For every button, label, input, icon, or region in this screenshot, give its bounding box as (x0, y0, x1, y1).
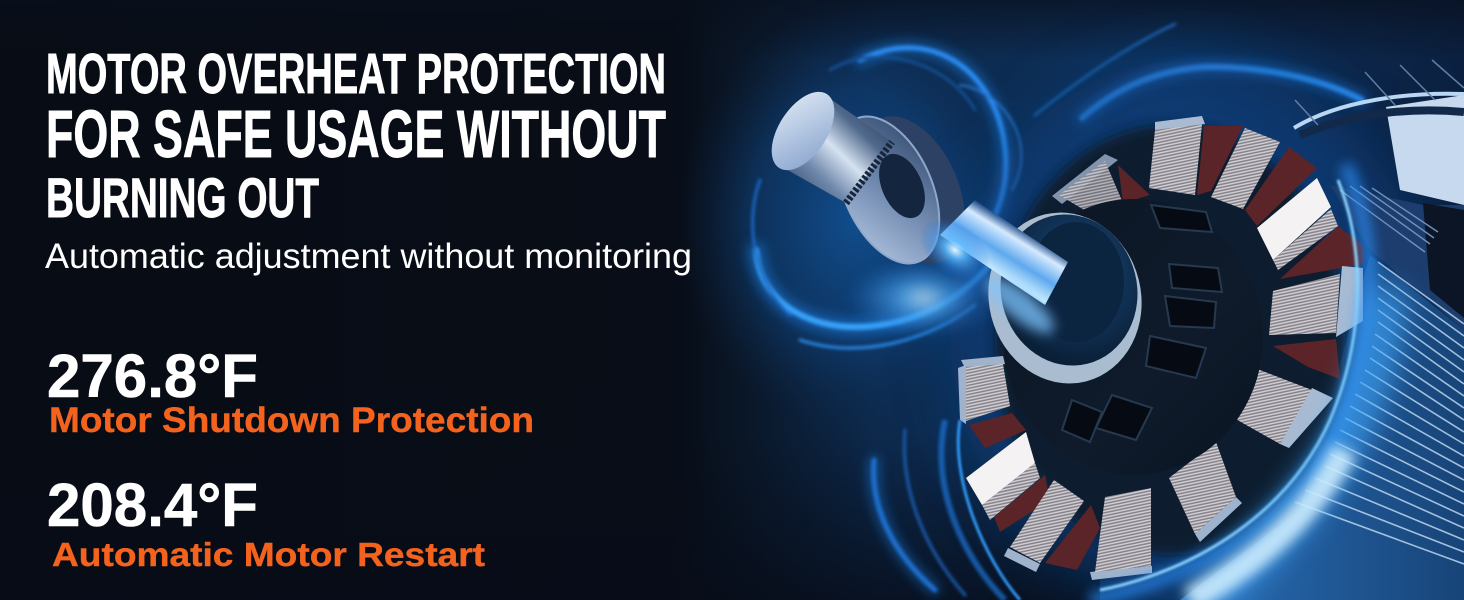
motor illustration (753, 24, 1464, 600)
subtitle: Automatic adjustment without monitoring (45, 237, 692, 276)
stator dark body (995, 125, 1345, 555)
coil end caps (1155, 116, 1363, 448)
motor shaft (907, 200, 1068, 342)
blue energy swirls (753, 24, 1362, 595)
stator laminations (1180, 255, 1464, 600)
wound copper mesh (966, 124, 1340, 572)
stat: motor restart: Automatic Motor Restart (52, 536, 485, 573)
glowing energy ring (941, 165, 1385, 600)
stat: motor shutdown (47, 342, 534, 440)
title: BURNING OUT (46, 166, 319, 229)
stat: motor restart (47, 471, 485, 573)
upper right stator ring (1294, 60, 1464, 330)
front silver ring (970, 196, 1160, 400)
title: FOR SAFE USAGE WITHOUT (46, 97, 666, 172)
title (46, 42, 666, 229)
black rotor hub (1003, 199, 1263, 475)
coil frames (958, 154, 1242, 580)
red copper windings (969, 126, 1363, 570)
stat: motor shutdown: 276.8°F (47, 342, 258, 410)
title: MOTOR OVERHEAT PROTECTION (46, 42, 666, 106)
coils (958, 116, 1363, 580)
stator back glow (950, 60, 1430, 600)
stat: motor restart: 208.4°F (47, 471, 258, 539)
stat: motor shutdown: Motor Shutdown Protection (49, 401, 534, 440)
silver shaft cap cylinder (759, 81, 892, 203)
bearing disc (816, 100, 986, 280)
bright white coil faces (966, 178, 1331, 505)
